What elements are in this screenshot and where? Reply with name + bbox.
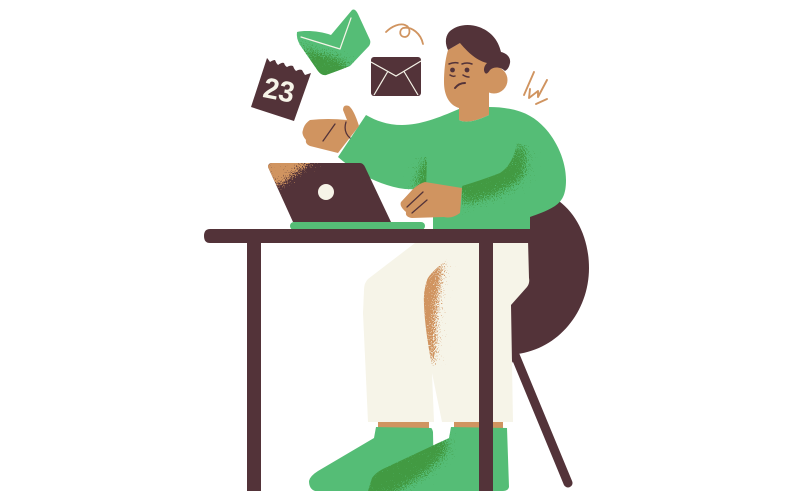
chair [508,199,589,483]
left foot [309,422,434,491]
trousers [363,240,529,422]
shoe shading [368,434,456,491]
desk [204,229,530,491]
torso shading [455,135,527,206]
laptop shading [268,163,321,194]
brown envelope icon [371,57,421,96]
envelope shading [298,42,350,85]
calendar icon [251,58,311,121]
right foot [368,422,509,491]
curly squiggle [386,24,423,44]
laptop [268,163,425,229]
hair [446,25,510,74]
green sweater [338,107,566,230]
neck and head [444,25,510,122]
face details [449,63,472,88]
calendar icon: 23 [261,72,297,110]
right hand on laptop [401,182,462,218]
sleeve shading [408,157,427,190]
trouser shading [415,255,445,370]
green flying envelope [296,10,370,76]
left raised hand [302,106,359,153]
frustration marks [524,72,547,104]
illustration: overwhelmed man at desk [204,10,589,491]
